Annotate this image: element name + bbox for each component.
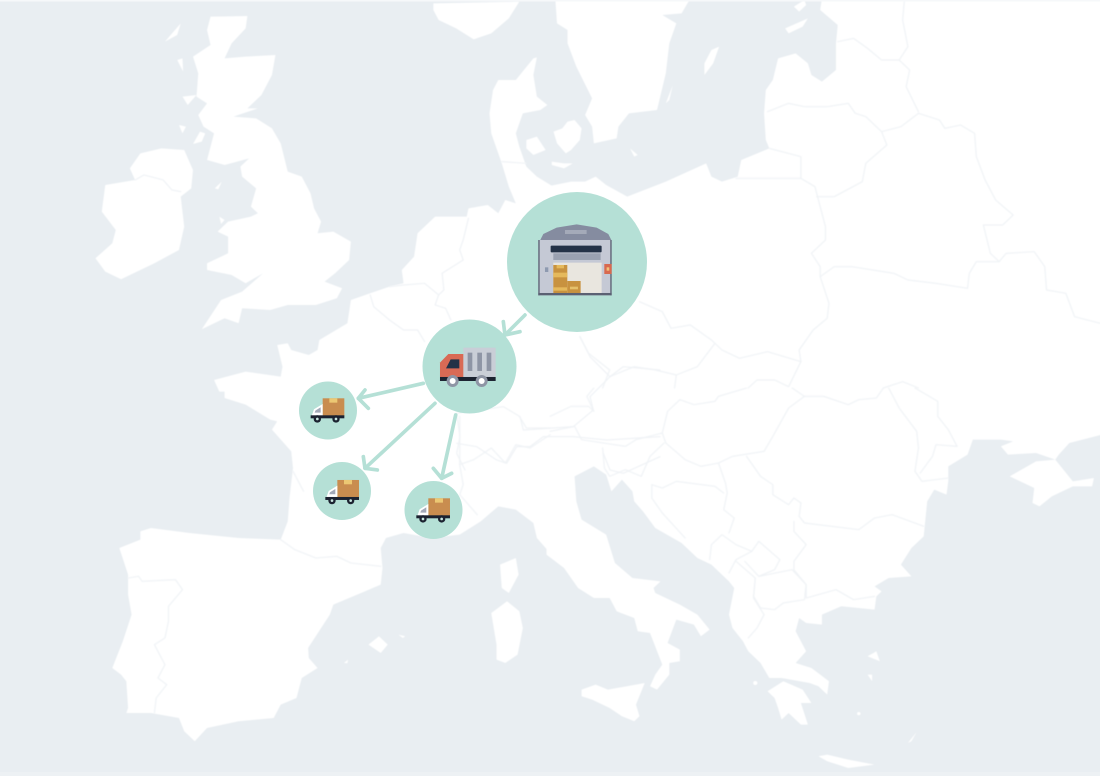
- distribution network diagram: [299, 192, 647, 539]
- icon: delivery truck: [440, 348, 496, 387]
- borders: central Europe: [457, 337, 660, 473]
- land: south-east quadrant (Italy, Balkans, Greece, Crimea): [546, 385, 1100, 768]
- arrow: truck to north-west delivery: [358, 383, 423, 408]
- borders: north-west: [135, 162, 526, 342]
- node: delivery circle south-west: [313, 462, 371, 520]
- icon: delivery van south: [416, 498, 450, 523]
- node: delivery circle south: [404, 481, 462, 539]
- land: south-west quadrant (Iberia, southern France, Corsica, Sardinia): [112, 385, 554, 741]
- land: north-west quadrant (British Isles, Benelux, northern France): [95, 2, 554, 392]
- icon: warehouse: [538, 224, 612, 295]
- arrow: warehouse to truck: [503, 315, 525, 335]
- arrow: truck to south-west delivery: [363, 403, 435, 470]
- borders: south-east: [550, 388, 957, 638]
- arrow: truck to south delivery: [433, 415, 456, 478]
- node: delivery circle north-west: [299, 382, 357, 440]
- borders: north-east: [580, 0, 1100, 388]
- land: north-east quadrant (Sweden, Baltics, Poland, Belarus, Ukraine): [546, 0, 1100, 392]
- borders: south-west: [128, 416, 550, 713]
- icon: delivery van north-west: [311, 398, 344, 423]
- icon: delivery van south-west: [325, 480, 359, 504]
- node: warehouse circle: [507, 192, 647, 332]
- node: truck circle: [422, 320, 516, 414]
- top edge band: [0, 0, 1100, 2]
- bottom edge band: [0, 772, 1100, 776]
